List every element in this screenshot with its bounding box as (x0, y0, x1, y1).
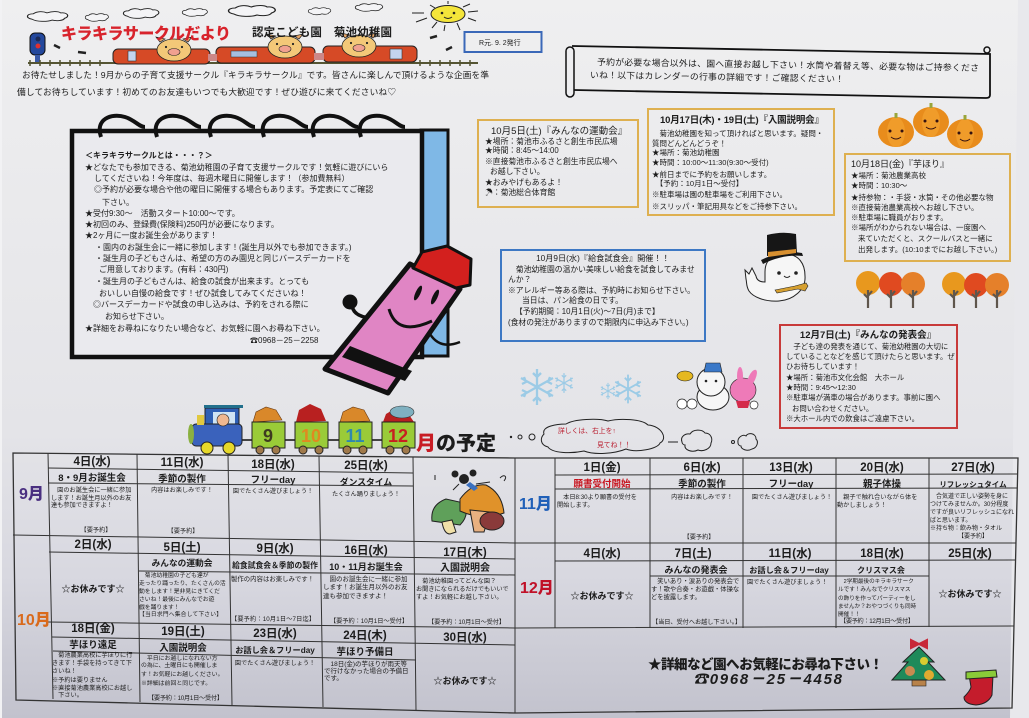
panel: school lunch tasting (501, 250, 705, 341)
thought cloud note (510, 419, 757, 453)
thought cloud note: 見てね！！ (597, 441, 631, 449)
calendar: September: たくさん踊りましょう！ (332, 491, 400, 498)
month labels: 11月 (519, 495, 552, 513)
calendar: October: 入園説明会 (159, 642, 207, 654)
calendar: October: 芋ほり予備日 (336, 646, 394, 658)
panel: potato digging event: 来ていただくと、スクールバスと一緒に (858, 233, 993, 243)
panel: school briefing event: 質問どんどんどうぞ！ (652, 138, 727, 148)
calendar: September: 季節の製作 (158, 473, 206, 485)
calendar: October: すよ！お気軽にお越し下さい。 (416, 593, 503, 601)
panel: school briefing event: 10月17日(木)・19日(土)『入園説明会』 (660, 114, 824, 126)
calendar: September: 11日(水) (161, 455, 204, 469)
subtitle: 認定こども園 菊池幼稚園 (252, 25, 392, 39)
calendar: September: 25日(水) (344, 458, 388, 472)
calendar: December: お話し会＆フリーday (749, 565, 829, 575)
calendar: October: 【要予約：10月1日～受付】 (330, 617, 408, 625)
calendar: November: ※持ち物：飲み物・タオル (930, 524, 1002, 532)
notebook text: してくださいね！今年度は、毎週木曜日に開催します！（参加費無料） (94, 173, 350, 183)
calendar: September: 達も参加できますよ！ (51, 501, 113, 509)
calendar: December: ルです！みんなでクリスマス (838, 586, 911, 593)
calendar: December: 25日(水) (948, 546, 992, 560)
panel: school lunch tasting: んか？ (508, 275, 531, 284)
calendar: October: 16日(水) (344, 543, 388, 557)
heading: schedule: 月 (416, 433, 436, 455)
panel: undoukai event: ★場所：菊池市ふるさと創生市民広場 (485, 136, 618, 146)
calendar: October: 19日(土) (161, 624, 205, 638)
calendar: September: 園のお誕生会に一緒に参加 (51, 486, 131, 494)
panel: recital event: ★場所：菊池市文化会館 大ホール (786, 373, 905, 382)
calendar: October: 【要予約：10月1日～受付】 (148, 694, 223, 702)
notebook text: ★受付9:30～ 活動スタート10:00～です。 (85, 208, 240, 218)
calendar: October: さいね！ (52, 668, 77, 675)
calendar: November: 親子体操 (863, 478, 901, 490)
intro text: お待たせしました！9月からの子育て支援サークル『キラキラサークル』です。皆さんに楽しんで頂けるような企画を準 (22, 69, 489, 80)
panel: recital event: 12月7日(土)『みんなの発表会』 (800, 329, 936, 341)
calendar: October: 戯を踊ります！ (139, 603, 180, 611)
notebook text: おいしい自慢の給食です！ぜひ試食してみてくださいね！ (99, 288, 307, 298)
calendar: November: 【要予約】 (958, 532, 988, 540)
calendar: December: す！歌や合奏・お遊戯・体操な (651, 584, 739, 593)
icon: mouse on mushrooms (432, 470, 506, 534)
panel: school lunch tasting: 菊池幼稚園の温かい美味しい給食を試食してみませ (508, 264, 695, 274)
panel: potato digging event: 10月18日(金)『芋ほり』 (851, 158, 949, 169)
panel: school lunch tasting: (食材の発注がありますので期限内に申込み下さい。) (508, 317, 689, 327)
icon: freight train with months: 12 (388, 426, 408, 446)
notebook text (85, 150, 388, 345)
calendar: November: 願書受付開始 (573, 478, 631, 490)
calendar: October: 18日(金) (71, 621, 115, 635)
calendar: December: みんなの発表会 (664, 564, 728, 575)
calendar: December: 7日(土) (674, 546, 712, 560)
panel: potato digging event: ★場所：菊池農業高校 (851, 170, 926, 180)
panel: notebook about Kirakira Circle (72, 116, 448, 357)
calendar: November: つけてみませんか。30分程度 (930, 500, 1008, 508)
panel: potato digging event: ★持参物：・手袋・水筒・その他必要な物 (851, 192, 994, 202)
calendar: December: の飾りを作ってパーティーをし (838, 594, 916, 602)
calendar: November: 合気道で正しい姿勢を身に (930, 492, 1008, 500)
calendar: October: 菊池農業高校に芋ほりに行 (52, 651, 132, 659)
panel: undoukai event: 10月5日(土)『みんなの運動会』 (491, 125, 627, 137)
calendar: November: ですが良いリフレッシュになれ (930, 508, 1014, 516)
calendar: December: 2学期最後のキラキラサーク (838, 577, 914, 585)
panel: recital event: ひお待ちしています！ (786, 362, 860, 371)
calendar: October: 【当日求門へ集合して下さい】 (139, 610, 222, 618)
contact note: ☎0968－25－4458 (693, 671, 843, 688)
calendar: October: 平日にお越しになれない方 (141, 654, 218, 662)
calendar: December: ませんか？おやつづくりも同時 (838, 602, 917, 610)
panel: school briefing event: ※スリッパ・筆記用具などをご持参下さい。 (652, 201, 802, 211)
calendar: September: 内容はお楽しみです！ (151, 486, 213, 494)
issue date box: R元. 9. 2発行 (479, 38, 521, 47)
calendar: October: 10・11月お誕生会 (329, 561, 403, 572)
notebook text: ◎バースデーカードや試食の申し込みは、予約をされる際に (93, 299, 309, 309)
header illustration: clouds, sun and train (27, 1, 478, 66)
calendar: December: ☆お休みです☆ (938, 588, 1002, 599)
calendar: October: 動をします！是非見にきてくだ (139, 587, 220, 595)
calendar: October: 下さい。 (52, 692, 83, 699)
calendar: October: 園でたくさん遊びましょう！ (235, 659, 315, 667)
calendar: October: 5日(土) (163, 540, 201, 554)
panel: school briefing event: ★場所：菊池幼稚園 (652, 147, 720, 157)
calendar: October (52, 537, 509, 702)
panel: recital event: ※大ホール内での飲食はご遠慮下さい。 (786, 414, 919, 423)
icon: crayon character (325, 246, 471, 393)
calendar: October: 【要予約：10月1日～受付】 (428, 618, 505, 626)
calendar: October: さいね！最後にみんなでお遊 (139, 595, 215, 603)
month labels (17, 485, 554, 629)
panel: school lunch tasting: ※アレルギー等ある際は、予約時にお知らせ下さい。 (508, 285, 695, 295)
icon: freight train with months: 10 (301, 426, 321, 446)
panel: recital event: ※駐車場が満車の場合があります。事前に園へ (786, 393, 941, 402)
calendar: November: 季節の製作 (678, 478, 726, 490)
calendar: October: ☆お休みです☆ (61, 583, 125, 594)
panel: potato digging event: ※駐車場に職員がおります。 (851, 212, 948, 222)
panel: undoukai event: お越し下さい。 (490, 166, 545, 176)
notebook text: ★詳細をお尋ねになりたい場合など、お気軽に園へお尋ね下さい。 (85, 323, 325, 333)
calendar: October: 芋ほり遠足 (69, 639, 117, 651)
calendar: November (557, 460, 1014, 541)
panel: undoukai event: ※直接菊池市ふるさと創生市民広場へ (485, 156, 618, 166)
notebook text: ◎予約が必要な場合や他の曜日に開催する場合もあります。予定表にてご確認 (94, 184, 373, 194)
calendar: September: ダンスタイム (340, 476, 392, 487)
panel: school briefing event: 菊池幼稚園を知って頂ければと思います。疑問・ (652, 128, 823, 138)
calendar: November: 動かしましょう！ (837, 501, 886, 509)
calendar: November: 1日(金) (583, 460, 621, 474)
month labels: 9月 (19, 485, 44, 503)
calendar grid (13, 453, 1018, 713)
panel: school briefing event (648, 109, 834, 215)
panel: undoukai event: ★時間：8:45～14:00 (485, 146, 559, 155)
icon: snowman and rabbit (677, 363, 759, 410)
icon: Christmas tree (892, 640, 945, 686)
calendar: September (51, 454, 400, 535)
notebook text: ★2ヶ月に一度お誕生会があります！ (85, 230, 217, 240)
calendar: October: ☆お休みです☆ (433, 675, 497, 686)
calendar: October: ※予約は要りません (52, 676, 108, 684)
calendar: October: す！お気軽にお越しください。 (141, 670, 223, 678)
calendar: September: 4日(水) (73, 454, 111, 468)
icon: freight train with months: 11 (345, 426, 365, 446)
heading: schedule: の予定 (436, 432, 496, 455)
icon: snowflakes (521, 369, 641, 405)
calendar: December: 【当日、受付へお越し下さい。】 (652, 618, 741, 626)
panel: potato digging event (845, 154, 1010, 261)
panel: recital event: 子ども達の発表を通じて、菊池幼稚園の大切に (786, 342, 948, 351)
scroll banner (566, 46, 990, 98)
panel: recital event: お問い合わせください。 (792, 404, 873, 413)
notebook text: お知らせ下さい。 (105, 311, 169, 321)
icon: ghost with top hat (745, 233, 808, 301)
notebook text: ☎0968－25－2258 (250, 336, 319, 345)
notebook text: ご用意しております。(有料：430円) (99, 264, 229, 274)
calendar: October: お話し会＆フリーday (235, 645, 315, 655)
panel: recital event: していることなどを感じて頂けたらと思います。ぜ (786, 352, 955, 361)
calendar: October: します！お誕生月以外のお友 (323, 582, 408, 591)
calendar: December: 笑いあり・涙ありの発表会で (651, 576, 739, 585)
icon: freight train with months: 9 (263, 426, 273, 446)
panel: school lunch tasting: 10月9日(水)『給食試食会』開催！！ (536, 253, 670, 263)
panel: undoukai event (478, 120, 638, 207)
calendar: November: 内容はお楽しみです！ (671, 493, 733, 501)
calendar: November: リフレッシュタイム (939, 479, 1007, 489)
title: キラキラサークルだより (61, 25, 231, 43)
scroll banner: いね！以下はカレンダーの行事の詳細です！ご確認ください！ (590, 69, 844, 84)
calendar: October: 走ったり踊ったり、たくさんの活 (139, 579, 226, 587)
calendar: November: 本日8:30より願書の受付を (557, 493, 637, 501)
month labels: 10月 (17, 611, 51, 629)
panel: undoukai event: ★おみやげもあるよ！ (485, 178, 563, 187)
icon: autumn trees (856, 271, 1009, 308)
panel: school briefing event: ★時間：10:00～11:30(9:30～受付) (652, 157, 769, 167)
calendar: December: ☆お休みです☆ (570, 590, 634, 601)
icon: pumpkins (878, 103, 983, 149)
calendar: November: 6日(水) (683, 460, 721, 474)
calendar: December: 11日(水) (769, 546, 812, 560)
calendar: October: ※詳細は前回と同じです。 (141, 679, 211, 687)
calendar: October: 30日(水) (443, 630, 487, 644)
calendar: October: です。 (324, 674, 343, 682)
calendar: September: 【要予約】 (81, 526, 111, 534)
contact note: ★詳細など園へお気軽にお尋ね下さい！ (648, 656, 883, 672)
calendar: November: 13日(水) (769, 460, 813, 474)
notebook text: 下さい。 (102, 198, 134, 207)
issue date box (464, 32, 542, 52)
calendar: December: クリスマス会 (857, 565, 905, 575)
panel: school lunch tasting: 【予約期間：10月1日(火)～7日(月)まで】 (515, 306, 660, 316)
calendar: October: 24日(木) (343, 628, 387, 642)
calendar: December: 園でたくさん遊びましょう！ (747, 578, 827, 586)
panel: undoukai event: ☂：菊池総合体育館 (485, 187, 555, 197)
calendar: October: 2日(水) (74, 537, 112, 551)
calendar: October: 給食試食会＆季節の製作 (232, 560, 318, 570)
notebook text: ★初回のみ、登録費(保険料)250円が必要になります。 (85, 219, 279, 229)
calendar: December: どを披露します。 (651, 592, 701, 601)
panel: school briefing event: ※駐車場は園の駐車場をご利用下さい。 (652, 189, 787, 199)
calendar: October: の為に、土曜日にも開催しま (141, 661, 218, 669)
icon: freight train with months (188, 404, 415, 454)
calendar: October: 製作の内容はお楽しみです！ (231, 574, 314, 583)
contact note (648, 656, 883, 688)
panel: potato digging event: ※直接菊池農業高校へお越し下さい。 (851, 202, 978, 212)
panel: potato digging event: 出発します。(10:10までにお越し下さい。) (858, 244, 998, 254)
calendar: October: 18日(金)の芋ほりが雨天等 (324, 659, 408, 668)
calendar: November: 27日(水) (951, 460, 995, 474)
calendar: November: 親子で触れ合いながら体を (837, 493, 917, 501)
calendar: October: 達も参加できますよ！ (323, 591, 388, 600)
calendar: November: 園でたくさん遊びましょう！ (752, 493, 832, 501)
calendar: October: 【要予約：10月1日～7日迄】 (231, 615, 315, 623)
calendar: November: ばと思います。 (930, 516, 971, 524)
scroll banner: 予約が必要な場合以外は、園へ直接お越し下さい！水筒や着替え等、必要な物はご持参くださ (597, 56, 979, 73)
panel: potato digging event: ★時間：10:30～ (851, 181, 908, 190)
calendar: October: きます！手袋を持ってきて下 (52, 659, 132, 667)
panel: school briefing event: 【予約：10月1日～受付】 (652, 178, 743, 188)
calendar: September: 18日(水) (251, 457, 295, 471)
calendar: September: 8・9月お誕生会 (58, 472, 126, 484)
calendar: October: 菊池幼稚園ってどんな園？ (416, 577, 496, 585)
calendar: December: 4日(水) (583, 546, 621, 560)
thought cloud note: 詳しくは、右上を↑ (558, 426, 616, 435)
calendar: October: お聞きになられるだけでもいいで (416, 586, 509, 593)
calendar: December: 開催！！ (838, 610, 860, 618)
calendar: October: で行けなかった場合の予備日 (324, 666, 408, 675)
panel: school lunch tasting: 当日は、パン給食の日です。 (522, 295, 623, 305)
calendar: November: 開始します。 (557, 501, 594, 509)
calendar: November: 20日(水) (860, 460, 904, 474)
month labels: 12月 (520, 579, 554, 597)
calendar: November: 【要予約】 (684, 533, 714, 541)
calendar: September: します！お誕生月以外のお友 (51, 494, 131, 502)
calendar: September: フリーday (251, 475, 296, 486)
panel: recital event: ★時間：9:45～12:30 (786, 383, 856, 392)
calendar: October: みんなの運動会 (152, 557, 213, 568)
notebook text: ★どなたでも参加できる、菊池幼稚園の子育て支援サークルです！気軽に遊びにいら (85, 162, 388, 172)
notebook text: ＜キラキラサークルとは・・・？＞ (85, 150, 213, 160)
calendar: November: フリーday (769, 479, 814, 490)
calendar: October: 23日(水) (253, 626, 297, 640)
panel: school briefing event: ★前日までに予約をお願いします。 (652, 169, 771, 179)
notebook text: ・誕生月の子どもさんは、希望の方のみ園児と同じバースデーカードを (95, 253, 351, 263)
panel: potato digging event: ※場所がわかられない場合は、一度園へ (851, 222, 986, 232)
calendar: October: 9日(水) (256, 541, 294, 555)
calendar: October: 入園説明会 (440, 561, 490, 574)
calendar: December: 18日(水) (860, 546, 904, 560)
calendar: December (570, 546, 1002, 626)
intro text (17, 69, 489, 97)
calendar: September: 【要予約】 (168, 527, 198, 535)
icon: Christmas stocking (964, 670, 997, 705)
calendar: December: 【要予約：12月1日～受付】 (840, 617, 914, 625)
calendar: October: 菊池幼稚園の子ども達が (139, 571, 209, 579)
notebook text: ・誕生月の子どもさんは、給食の試食が出来ます。とっても (95, 276, 309, 286)
notebook text: ・園内のお誕生会に一緒に参加します！(誕生月以外でも参加できます。) (95, 242, 352, 252)
calendar: October: 17日(木) (443, 545, 487, 559)
calendar: September: 園でたくさん遊びましょう！ (233, 487, 313, 495)
calendar: October: ※直接菊池農業高校にお越し (52, 684, 132, 692)
calendar: October: 園のお誕生会に一緒に参加 (323, 574, 408, 583)
intro text: 備してお待ちしています！初めてのお友達もいつでも大歓迎です！ぜひ遊びに来てくださいね♡ (17, 86, 396, 97)
panel: recital event (780, 325, 957, 428)
